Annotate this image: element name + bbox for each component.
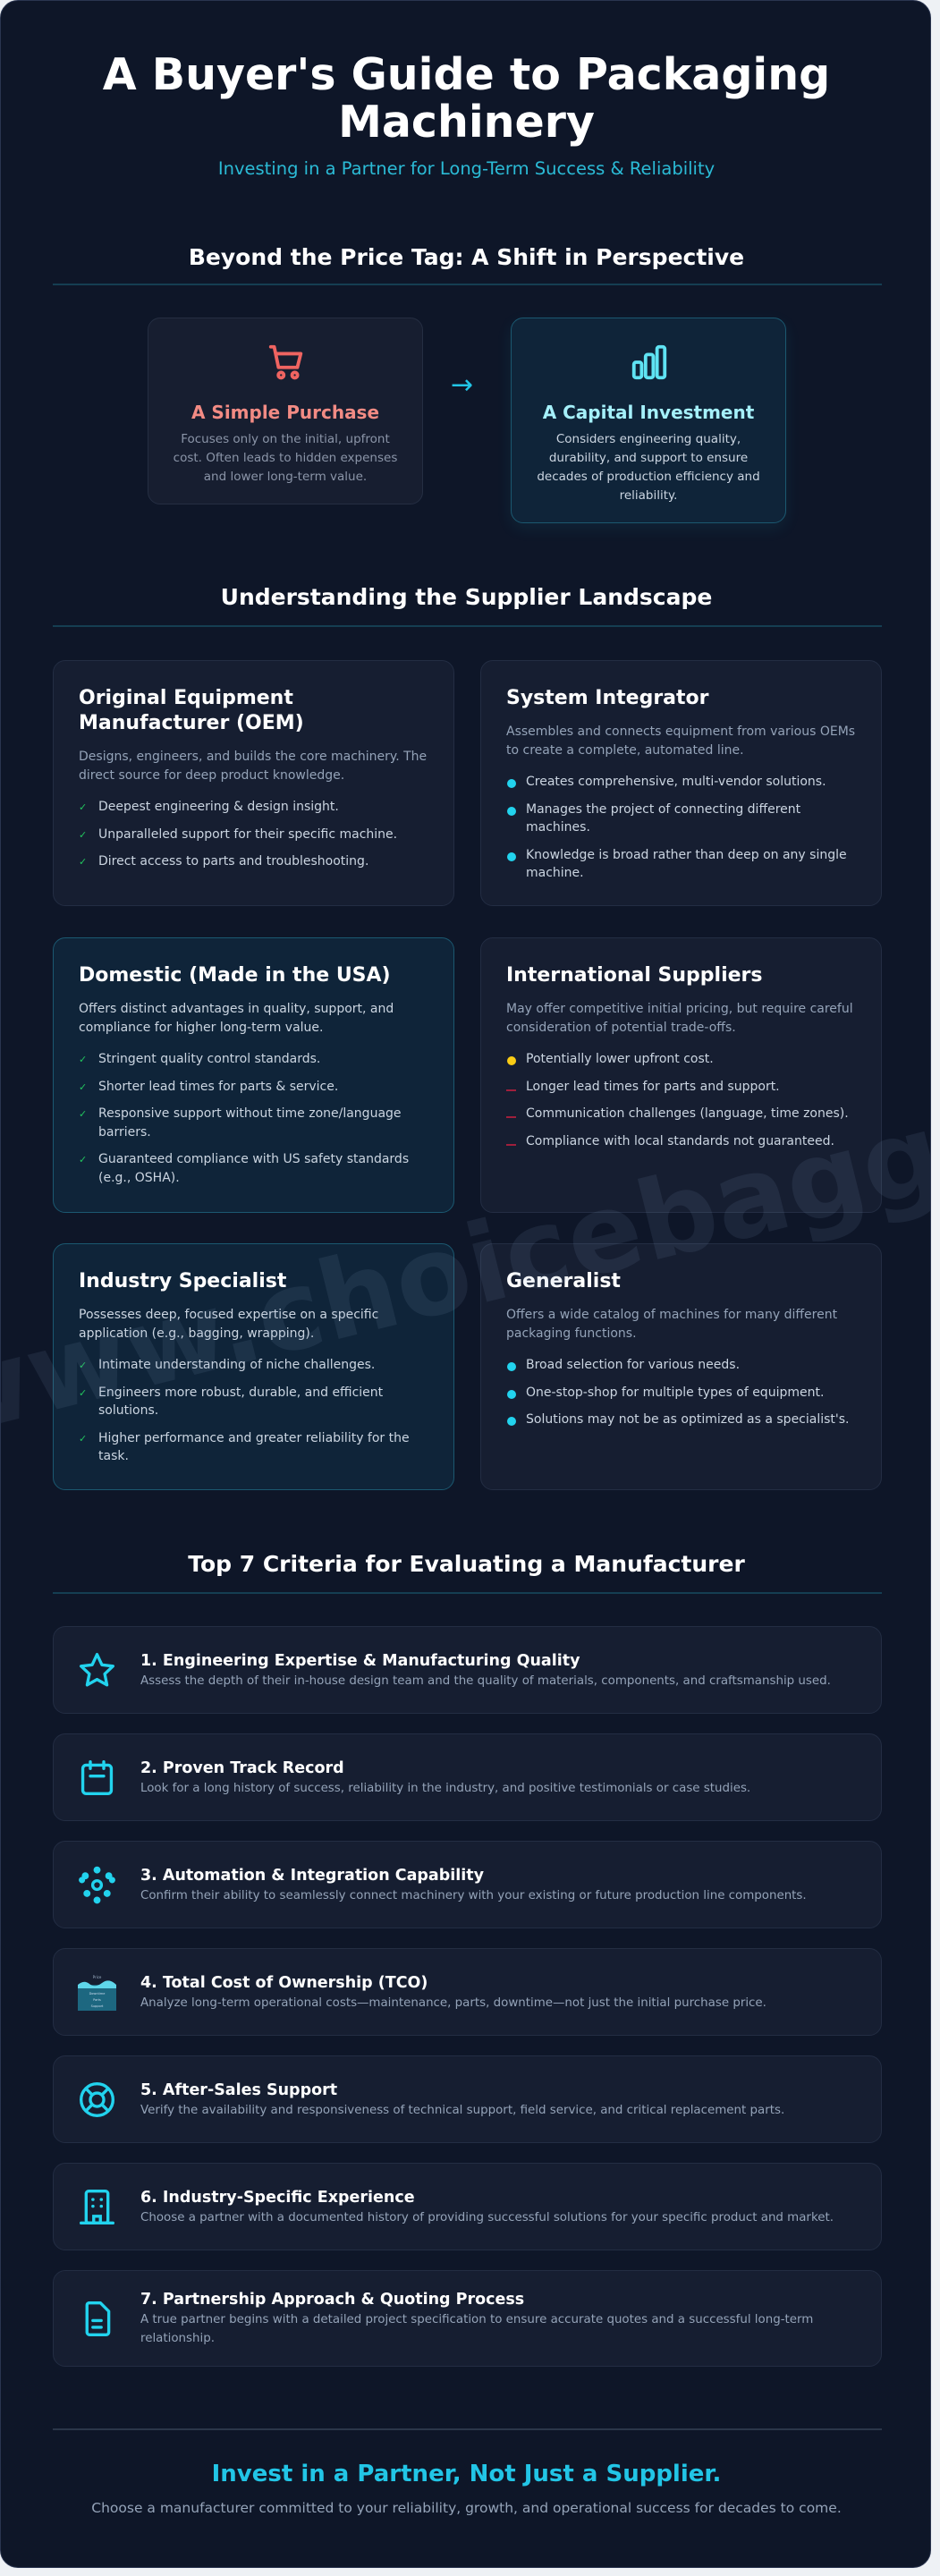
text: Considers engineering quality, durability, and support to ensure decades of production efficiency and reliability. <box>537 432 760 503</box>
icon: document <box>86 2301 111 2336</box>
criterion 1 <box>53 1626 882 1714</box>
footer heading: Invest in a Partner, Not Just a Supplier. <box>212 2461 721 2487</box>
panel: domestic: Domestic (Made in the USA) <box>79 964 391 987</box>
icon: shopping cart <box>268 345 302 379</box>
heading: supplier landscape: Understanding the Supplier Landscape <box>221 584 712 610</box>
criterion 7 <box>53 2270 882 2367</box>
panel: industry specialist: Engineers more robust, durable, and efficient solutions. <box>98 1385 383 1418</box>
panel: industry specialist: ✓ <box>79 1360 87 1371</box>
panel: system integrator: Assembles and connects equipment from various OEMs to create a complete, automated line. <box>506 724 855 758</box>
panel: simple purchase <box>148 318 423 504</box>
panel: international: Potentially lower upfront cost. <box>526 1052 714 1066</box>
criterion 2 <box>53 1733 882 1821</box>
criterion 5: 5. After-Sales Support <box>140 2080 337 2098</box>
icon: lifebuoy <box>80 2082 114 2117</box>
panel: industry specialist: Industry Specialist <box>79 1270 286 1292</box>
criterion 4: Analyze long-term operational costs—maintenance, parts, downtime—not just the initial purchase price. <box>140 1996 766 2009</box>
panel: OEM: Deepest engineering & design insight. <box>98 800 339 814</box>
panel: domestic: Stringent quality control standards. <box>98 1052 320 1066</box>
panel: system integrator: Manages the project of connecting different machines. <box>526 801 800 835</box>
panel: system integrator: System Integrator <box>506 687 709 709</box>
icon: calendar <box>80 1760 113 1795</box>
criterion 1: 1. Engineering Expertise & Manufacturing Quality <box>140 1651 580 1669</box>
criterion 6 <box>53 2163 882 2250</box>
panel: international <box>480 937 882 1213</box>
panel: generalist: Solutions may not be as optimized as a specialist's. <box>526 1412 850 1427</box>
panel: domestic: Offers distinct advantages in quality, support, and compliance for higher long-term value. <box>79 1002 394 1035</box>
subtitle: Investing in a Partner for Long-Term Success & Reliability <box>218 158 715 179</box>
panel: industry specialist: Higher performance and greater reliability for the task. <box>98 1431 410 1463</box>
criterion 5: Verify the availability and responsiveness of technical support, field service, and critical replacement parts. <box>140 2104 784 2116</box>
panel: OEM: ✓ <box>79 828 87 841</box>
heading: top 7 criteria: Top 7 Criteria for Evaluating a Manufacturer <box>188 1551 745 1577</box>
criterion 6: Choose a partner with a documented history of providing successful solutions for your specific product and market. <box>140 2211 834 2224</box>
panel: OEM: Direct access to parts and troubleshooting. <box>98 854 368 869</box>
panel: domestic: Responsive support without time zone/language barriers. <box>98 1106 402 1140</box>
panel: international: Compliance with local standards not guaranteed. <box>526 1134 834 1148</box>
panel: generalist: One-stop-shop for multiple types of equipment. <box>526 1385 824 1399</box>
panel: international: May offer competitive initial pricing, but require careful consideration of potential trade-offs. <box>506 1002 853 1035</box>
icon: star <box>79 1653 114 1687</box>
text: Focuses only on the initial, upfront cost. Often leads to hidden expenses and lower long-term value. <box>174 432 397 484</box>
footer text: Choose a manufacturer committed to your reliability, growth, and operational success for decades to come. <box>91 2500 842 2516</box>
criterion 3: Confirm their ability to seamlessly connect machinery with your existing or future production line components. <box>140 1889 807 1902</box>
panel: industry specialist: ✓ <box>79 1386 87 1399</box>
title <box>103 49 830 148</box>
panel: OEM: Original Equipment <box>79 687 293 709</box>
panel: industry specialist: Possesses deep, focused expertise on a specific application (e.g., bagging, wrapping). <box>79 1308 378 1341</box>
panel: domestic: ✓ <box>79 1054 87 1065</box>
title: A Buyer's Guide to Packaging <box>103 49 830 100</box>
panel: domestic: ✓ <box>79 1154 87 1165</box>
panel: system integrator <box>480 660 882 906</box>
icon: bar chart <box>631 345 667 379</box>
criterion 4 <box>53 1948 882 2036</box>
panel: industry specialist <box>53 1243 454 1490</box>
panel: domestic <box>53 937 454 1213</box>
panel: system integrator: Creates comprehensive, multi-vendor solutions. <box>526 775 826 789</box>
icon: iceberg cost: Support <box>91 2004 104 2007</box>
icon: iceberg cost <box>78 1975 116 2011</box>
panel: generalist: Broad selection for various needs. <box>526 1358 740 1372</box>
panel: international: International Suppliers <box>506 964 762 987</box>
criterion 3 <box>53 1841 882 1928</box>
panel: OEM: Unparalleled support for their specific machine. <box>98 826 397 841</box>
criterion 7: relationship. <box>140 2332 215 2345</box>
panel: domestic: ✓ <box>79 1080 87 1093</box>
arrow: → <box>451 369 473 401</box>
icon: network dots <box>79 1866 115 1903</box>
panel: industry specialist: ✓ <box>79 1433 87 1444</box>
panel: OEM: ✓ <box>79 856 87 868</box>
panel: international: Communication challenges (language, time zones). <box>526 1106 849 1121</box>
icon: iceberg cost: Downtime <box>89 1991 105 1995</box>
panel: domestic: ✓ <box>79 1108 87 1120</box>
panel: generalist <box>480 1243 882 1490</box>
icon: iceberg cost: Parts <box>93 1998 101 2002</box>
panel: OEM <box>53 660 454 906</box>
panel: domestic: Shorter lead times for parts & service. <box>98 1079 338 1093</box>
panel: system integrator: Knowledge is broad rather than deep on any single machine. <box>526 848 847 880</box>
panel: generalist: Generalist <box>506 1270 621 1292</box>
panel: OEM: Manufacturer (OEM) <box>79 712 304 734</box>
criterion 6: 6. Industry-Specific Experience <box>140 2188 415 2206</box>
criterion 7: 7. Partnership Approach & Quoting Process <box>140 2291 524 2309</box>
panel: industry specialist: Intimate understanding of niche challenges. <box>98 1358 375 1372</box>
icon: iceberg cost: Price <box>93 1975 102 1979</box>
heading: beyond the price tag: Beyond the Price Tag: A Shift in Perspective <box>189 244 744 270</box>
heading: A Capital Investment <box>543 402 754 423</box>
panel: capital investment <box>511 318 786 523</box>
criterion 1: Assess the depth of their in-house design team and the quality of materials, components, and craftsmanship used. <box>140 1674 831 1687</box>
title: Machinery <box>338 97 595 148</box>
panel: international: Longer lead times for parts and support. <box>526 1079 780 1093</box>
panel: generalist: Offers a wide catalog of machines for many different packaging functions. <box>506 1308 837 1341</box>
panel: domestic: Guaranteed compliance with US safety standards (e.g., OSHA). <box>98 1152 409 1184</box>
criterion 3: 3. Automation & Integration Capability <box>140 1866 484 1884</box>
panel: OEM: ✓ <box>79 801 87 813</box>
criterion 7: A true partner begins with a detailed project specification to ensure accurate quotes and a successful long-term <box>140 2313 813 2326</box>
criterion 2: 2. Proven Track Record <box>140 1758 344 1776</box>
criterion 2: Look for a long history of success, reliability in the industry, and positive testimonials or case studies. <box>140 1782 750 1794</box>
icon: building <box>80 2190 114 2224</box>
panel: OEM: Designs, engineers, and builds the core machinery. The direct source for deep product knowledge. <box>79 750 427 783</box>
criterion 4: 4. Total Cost of Ownership (TCO) <box>140 1973 428 1991</box>
criterion 5 <box>53 2055 882 2143</box>
heading: A Simple Purchase <box>191 402 379 423</box>
